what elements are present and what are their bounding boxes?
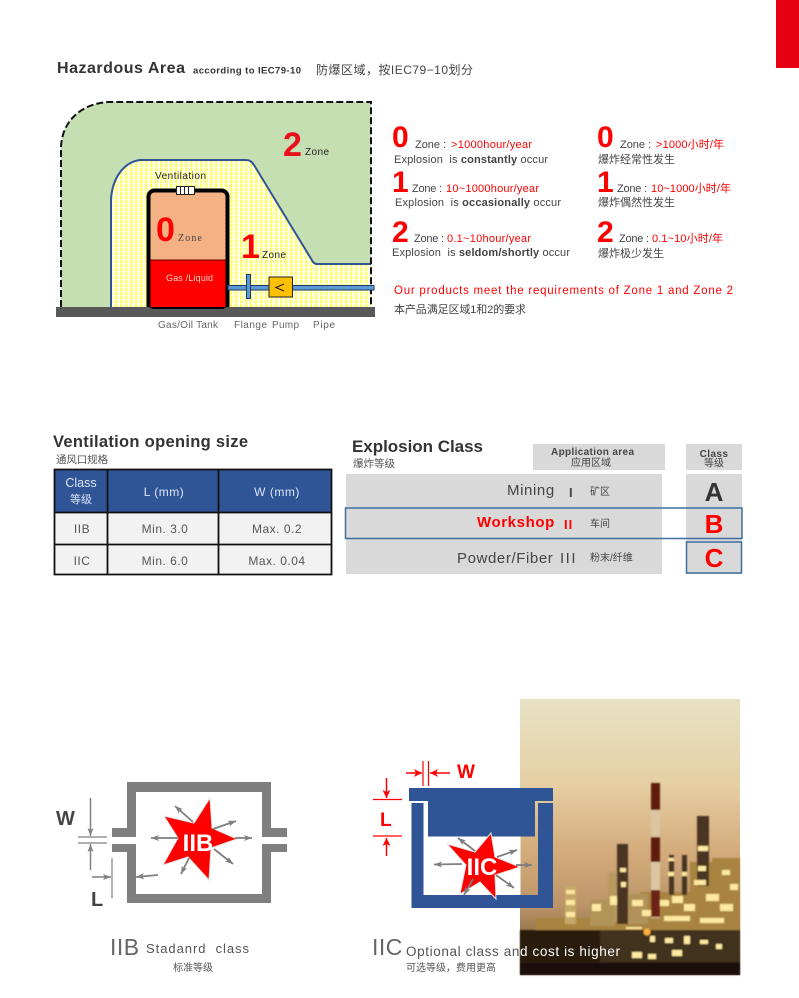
pump [269, 277, 292, 297]
IIC caption [372, 934, 620, 974]
zone 1 area [111, 160, 371, 307]
heading: hazardous area: 防爆区域，按IEC79−10划分 [316, 62, 473, 77]
zone 1 chinese: 10~1000小时/年 [651, 181, 731, 195]
heading: hazardous area [57, 60, 473, 77]
zone 2 chinese: 0.1~10小时/年 [652, 231, 723, 245]
equipment captions [158, 320, 335, 331]
refinery foreground [520, 927, 740, 975]
row IIB: Min. 3.0 [142, 522, 188, 536]
equipment captions: Gas/Oil Tank [158, 320, 219, 331]
requirement note: Our products meet the requirements of Zone 1 and Zone 2 [394, 285, 733, 297]
zone 1 english: 1 [392, 166, 409, 199]
zone 2 chinese: Zone : [619, 233, 649, 245]
zone 1 english: 10~1000hour/year [446, 183, 539, 195]
IIC star [447, 833, 520, 899]
heading: explosion class: 爆炸等级 [353, 457, 396, 470]
heading: ventilation opening size: 通风口规格 [56, 453, 108, 466]
table header [65, 476, 300, 506]
W dimension red [406, 761, 475, 786]
row IIB: IIB [74, 522, 90, 536]
row mining: I [569, 485, 573, 500]
W dimension: W [56, 808, 75, 830]
refinery mass [536, 858, 740, 930]
IIC caption: 可选等级，费用更高 [406, 961, 496, 974]
IIC blast arrows [434, 838, 532, 895]
W dimension red: W [457, 762, 475, 783]
red corner tab [776, 0, 799, 68]
zone diagram [56, 102, 375, 331]
IIC star label: IIC [467, 854, 497, 881]
zone 0 chinese: >1000小时/年 [656, 137, 724, 151]
zone labels: Zone [178, 233, 203, 244]
row workshop [477, 509, 723, 539]
row powder: Powder/Fiber [457, 550, 553, 567]
zone labels: Zone [262, 250, 286, 261]
row mining: 矿区 [590, 485, 610, 498]
chimney [651, 783, 660, 918]
row IIC [74, 554, 306, 568]
L dimension: L [91, 889, 103, 911]
class header: 等级 [704, 456, 724, 470]
IIB chamber walls [112, 782, 287, 903]
IIB caption: 标准等级 [173, 961, 213, 974]
zone 1 chinese: Zone : [617, 183, 647, 195]
zone 2 english: Zone : [414, 233, 444, 245]
row IIC: IIC [74, 554, 90, 568]
row powder: C [705, 543, 724, 573]
zone 0 english: Zone : [415, 139, 446, 151]
heading: explosion class [352, 437, 483, 470]
zone 2 english: Explosion is seldom/shortly occur [392, 247, 570, 259]
IIB blast arrows [136, 806, 252, 877]
IIC caption: IIC [372, 934, 403, 960]
heading: hazardous area: Hazardous Area [57, 60, 185, 77]
tank: Gas /Liquid [166, 273, 213, 283]
equipment captions: Flange [234, 320, 267, 331]
zone 0 english [392, 121, 548, 166]
zone 2 chinese [597, 216, 723, 260]
heading: ventilation opening size [53, 433, 248, 466]
zone 1 english [392, 166, 561, 209]
zone 2 dashed boundary [61, 102, 371, 307]
requirement note [394, 285, 733, 316]
zone definitions english [392, 121, 570, 259]
IIB caption: Stadanrd class [146, 941, 250, 956]
zone 0 english: 0 [392, 121, 409, 154]
refinery photo [520, 699, 740, 975]
zone 0 chinese: 爆炸经常性发生 [598, 152, 675, 166]
IIC diagram [373, 761, 553, 908]
zone labels: Zone [305, 147, 329, 158]
ground bar [56, 307, 375, 317]
tank [148, 190, 228, 307]
row IIB: Max. 0.2 [252, 522, 302, 536]
zone 1 chinese [597, 166, 731, 209]
table header: L (mm) [144, 485, 184, 499]
zone labels: 0 [156, 211, 175, 249]
zone 1 english: Zone : [412, 183, 442, 195]
zone 2 english: 2 [392, 216, 409, 249]
row workshop: Workshop [477, 514, 555, 531]
zone 0 english: Explosion is constantly occur [394, 154, 548, 166]
row mining: A [705, 477, 724, 507]
heading: hazardous area: according to IEC79-10 [193, 66, 301, 76]
IIB caption: IIB [110, 934, 140, 960]
row powder: 粉末/纤维 [590, 551, 633, 564]
L dimension red [373, 778, 402, 856]
IIC chamber [409, 788, 553, 908]
table header: Class [65, 476, 97, 490]
row workshop: B [705, 509, 723, 539]
row powder [457, 543, 724, 573]
equipment captions: Pump [272, 320, 299, 331]
zone 2 chinese: 爆炸极少发生 [598, 246, 664, 260]
heading: ventilation opening size: Ventilation opening size [53, 433, 248, 451]
ventilation grille: Ventilation [155, 171, 206, 182]
IIB star [163, 798, 237, 880]
row IIC: Min. 6.0 [142, 554, 188, 568]
application area header: 应用区域 [571, 456, 611, 469]
zone labels: 1 [241, 228, 260, 266]
zone definitions chinese [597, 121, 731, 260]
zone labels: 2 [283, 126, 302, 164]
row backgrounds [346, 474, 742, 574]
row mining [507, 477, 724, 507]
refinery towers [617, 816, 709, 924]
row IIB [74, 522, 302, 536]
pipe [228, 286, 374, 290]
table header: W (mm) [254, 485, 300, 499]
row IIC: Max. 0.04 [248, 554, 306, 568]
zone 2 chinese: 2 [597, 216, 614, 249]
row mining: Mining [507, 482, 555, 499]
IIB caption [110, 934, 250, 974]
L dimension red: L [380, 810, 392, 831]
zone 0 chinese: 0 [597, 121, 614, 154]
W dimension [56, 798, 112, 898]
heading: explosion class: Explosion Class [352, 437, 483, 456]
IIB star label: IIB [183, 830, 213, 857]
class header: Class [700, 449, 728, 460]
row workshop: 车间 [590, 517, 610, 530]
zone 0 english: >1000hour/year [451, 139, 532, 151]
requirement note: 本产品满足区域1和2的要求 [394, 302, 526, 316]
L dimension [91, 877, 111, 911]
ventilation table [54, 470, 332, 574]
zone 0 chinese: Zone : [620, 139, 651, 151]
ventilation grille [155, 171, 206, 194]
class header [686, 444, 742, 470]
table header: 等级 [70, 492, 92, 506]
application area header [533, 444, 665, 470]
highlight outlines [346, 508, 742, 573]
row powder: III [560, 550, 577, 567]
zone labels [156, 126, 329, 266]
application area header: Application area [551, 447, 634, 458]
IIC caption: Optional class and cost is higher [406, 944, 620, 959]
explosion class table [346, 444, 742, 574]
zone 1 chinese: 爆炸偶然性发生 [598, 195, 675, 209]
zone 2 english [392, 216, 570, 259]
flange [246, 274, 250, 298]
zone 1 chinese: 1 [597, 166, 614, 199]
IIC interior [423, 836, 520, 895]
row workshop: II [564, 517, 573, 532]
zone 2 area [61, 102, 371, 307]
zone 0 chinese [597, 121, 724, 166]
zone 1 english: Explosion is occasionally occur [395, 197, 561, 209]
equipment captions: Pipe [313, 320, 335, 331]
zone 2 english: 0.1~10hour/year [447, 233, 531, 245]
refinery lights [566, 846, 738, 923]
IIB diagram [56, 782, 287, 911]
